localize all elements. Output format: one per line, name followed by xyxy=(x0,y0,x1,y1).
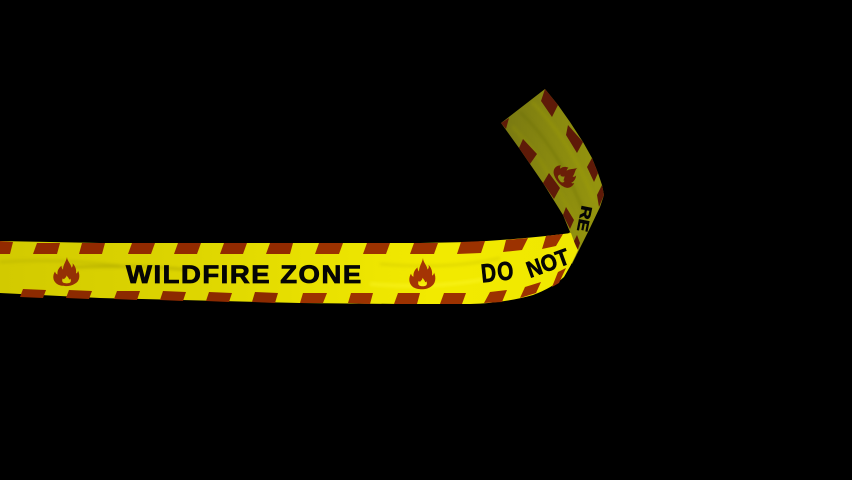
rear tape surface xyxy=(501,89,604,264)
rear tape text: RE xyxy=(574,204,595,233)
front section of tape xyxy=(0,233,578,304)
front tape folds xyxy=(0,258,500,286)
top edge stripes xyxy=(0,234,563,254)
rear section of tape curling away xyxy=(501,89,604,264)
bottom edge stripes xyxy=(20,268,566,304)
tape text: DO: DO xyxy=(480,256,516,288)
icon: left flame xyxy=(53,257,79,286)
front tape surface xyxy=(0,233,578,304)
tape text: NOT: NOT xyxy=(523,243,573,283)
tape text: WILDFIRE ZONE: WILDFIRE ZONE xyxy=(126,260,363,289)
icon: rear flame xyxy=(550,157,584,191)
icon: centre flame xyxy=(409,258,435,289)
rear tape stripes xyxy=(501,89,604,255)
rear tape folds xyxy=(512,102,594,220)
